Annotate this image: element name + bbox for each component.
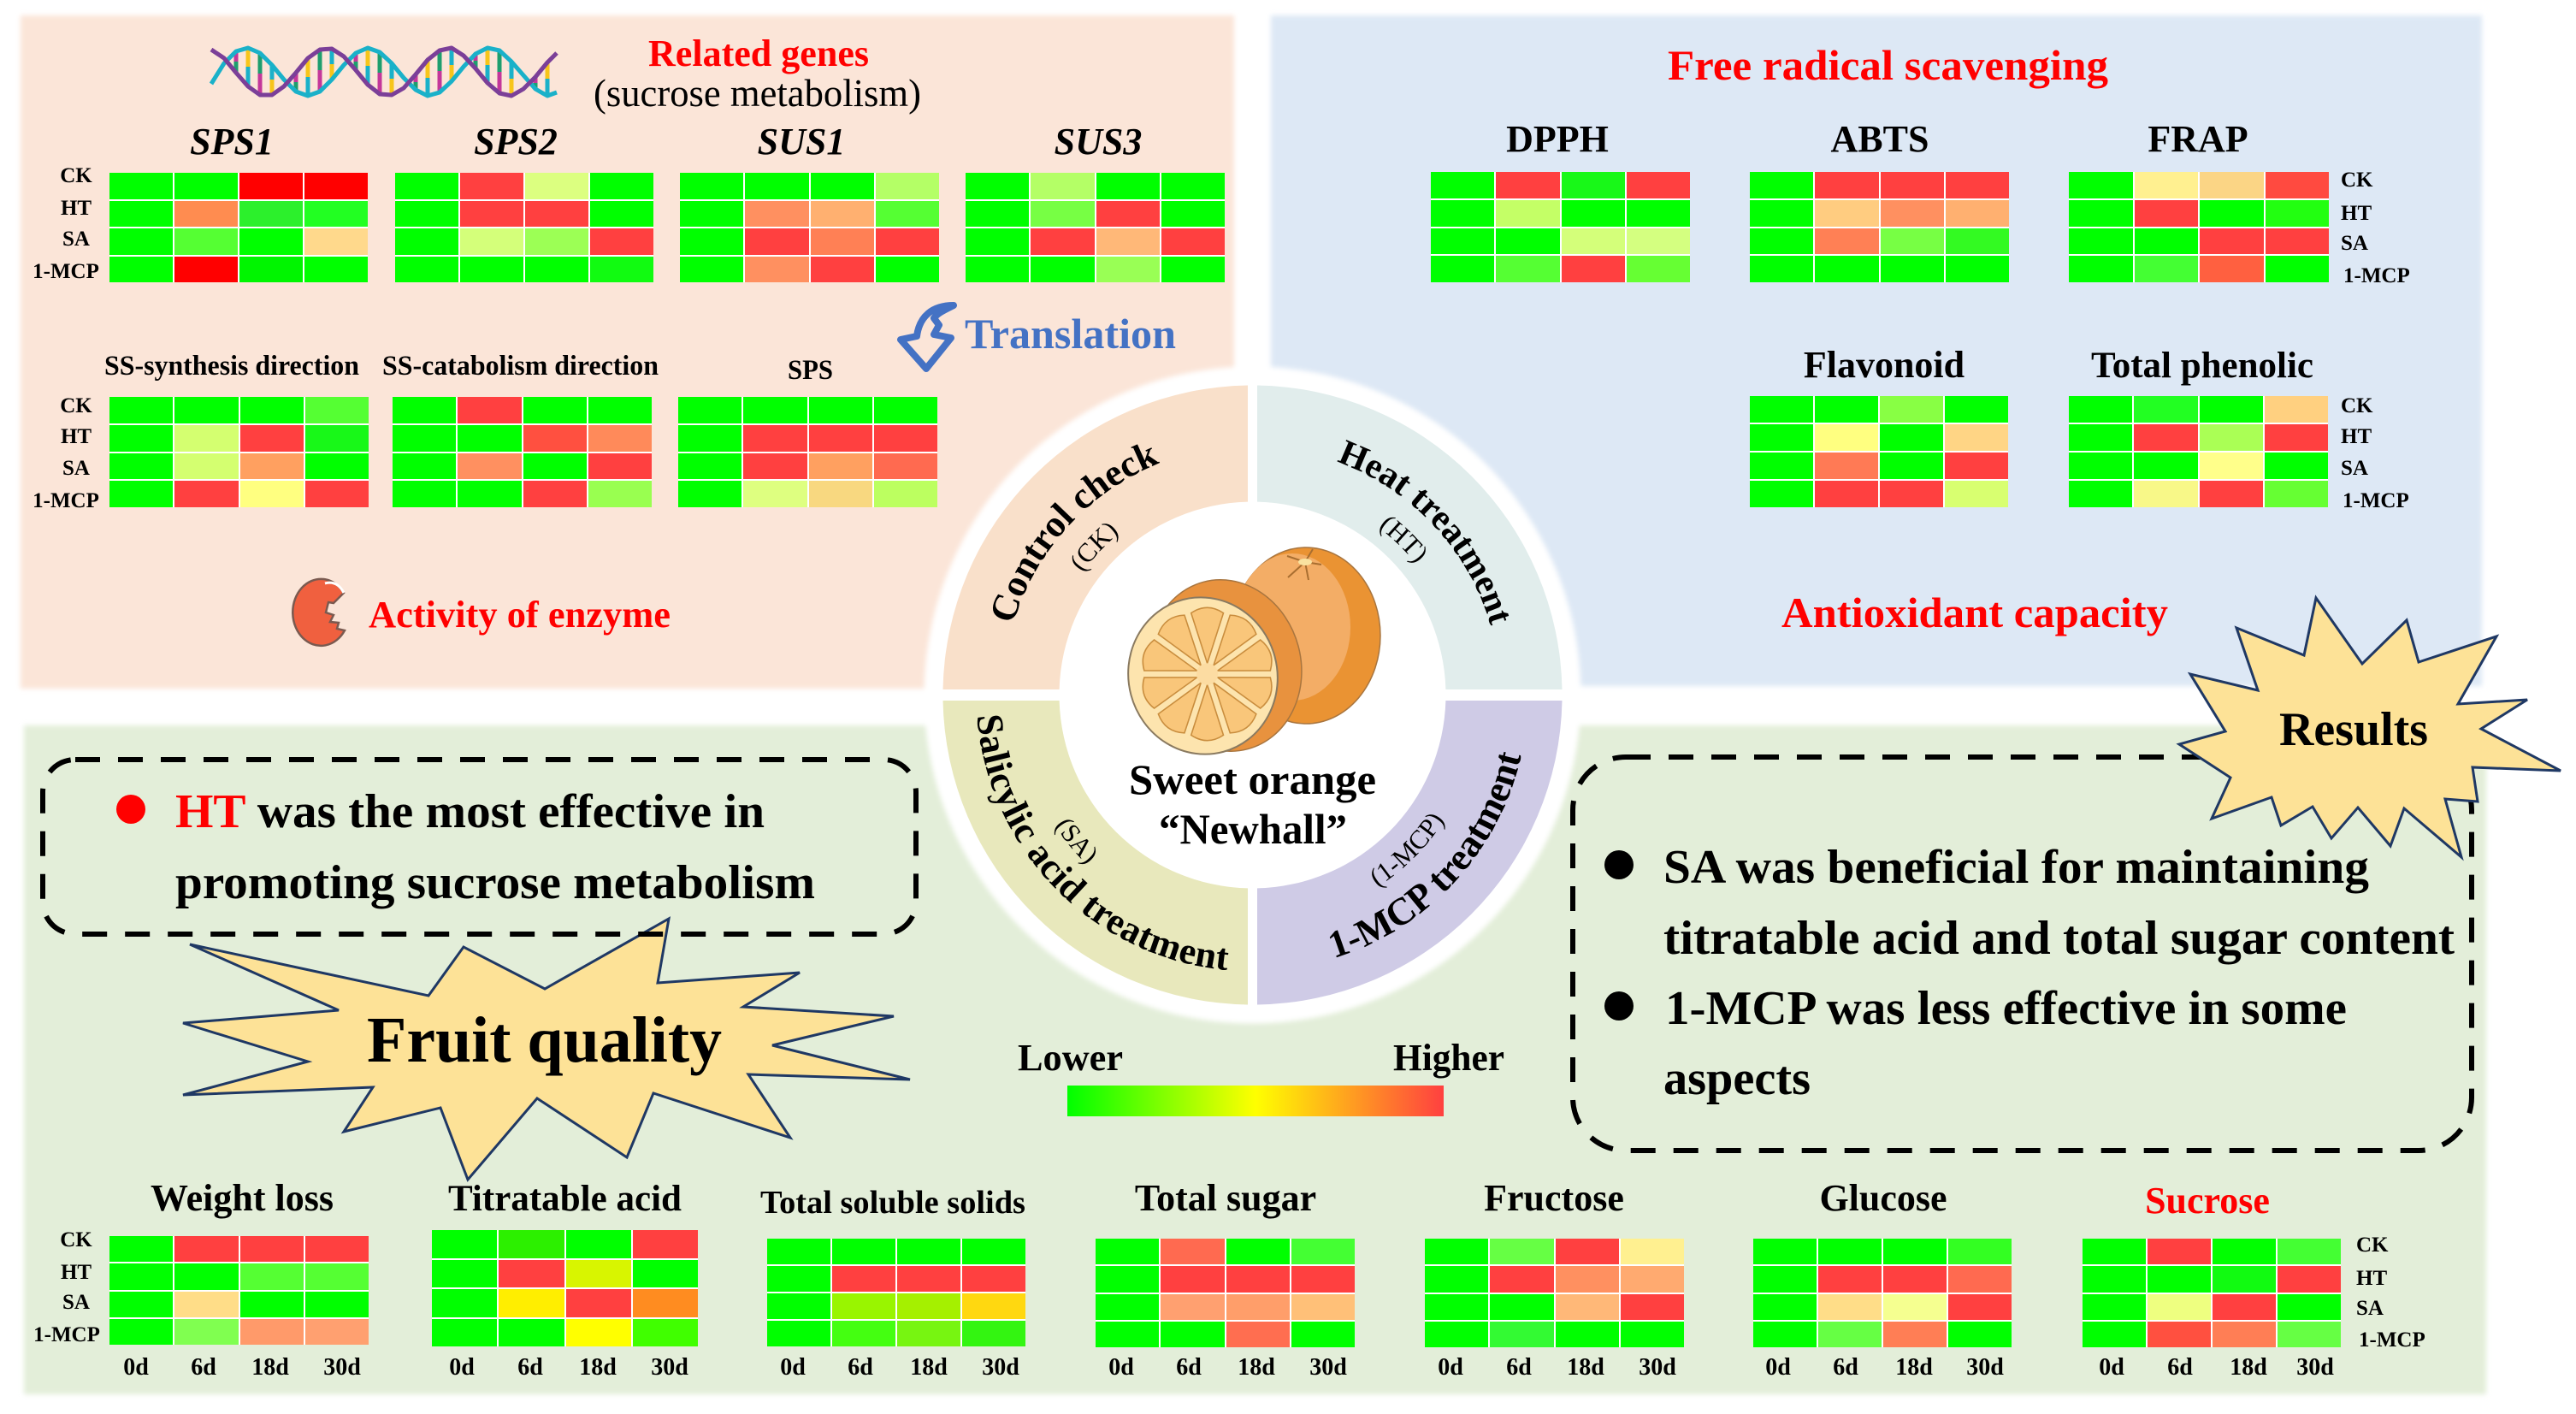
row labels: radical scavenging: 1-MCP: [2343, 264, 2410, 287]
axis labels: storage days: 0d: [1438, 1354, 1463, 1381]
title: Total sugar: Total sugar: [1135, 1177, 1316, 1219]
row labels: genes: HT: [61, 197, 92, 220]
title: SUS3: SUS3: [1055, 121, 1142, 163]
row labels: radical scavenging: CK: [2341, 169, 2373, 192]
segment: heat treatment: (HT): [1380, 517, 1426, 563]
callout: SA and 1-MCP findings: SA was beneficial for maintaining: [1663, 841, 2369, 894]
title: Flavonoid: Flavonoid: [1804, 344, 1964, 386]
title: Titratable acid: Titratable acid: [448, 1179, 682, 1219]
heatmap: SS-catabolism direction: [393, 397, 652, 507]
axis labels: storage days: 30d: [2296, 1354, 2334, 1381]
subheading: sucrose metabolism: (sucrose metabolism): [594, 71, 921, 115]
axis labels: storage days: 18d: [1567, 1354, 1604, 1381]
axis labels: storage days: 6d: [1506, 1354, 1532, 1381]
segment: control check: Control check: [992, 444, 1160, 620]
heatmap: ABTS: [1750, 172, 2009, 282]
row labels: antioxidants: HT: [2341, 425, 2372, 448]
callout: HT finding: [43, 760, 916, 934]
segment: 1-MCP treatment: (1-MCP): [1372, 814, 1445, 888]
title: Sucrose: Sucrose: [2145, 1180, 2270, 1222]
row labels: fruit quality: CK: [60, 1228, 92, 1251]
axis labels: storage days: 6d: [517, 1354, 543, 1381]
axis labels: storage days: 18d: [910, 1354, 948, 1381]
icon: translation arrow: [901, 305, 954, 369]
axis labels: storage days: 18d: [251, 1354, 289, 1381]
row labels: sucrose: [2356, 1234, 2425, 1352]
axis labels: storage days: 18d: [1238, 1354, 1275, 1381]
row labels: sucrose: SA: [2356, 1297, 2384, 1320]
icon: DNA helix: [211, 48, 557, 96]
legend: colour scale: [1018, 1037, 1504, 1116]
axis labels: storage days: 0d: [2099, 1354, 2124, 1381]
callout: HT finding: promoting sucrose metabolism: [175, 856, 815, 909]
callout: SA and 1-MCP findings: 1-MCP was less effective in some: [1665, 982, 2347, 1035]
row labels: genes: [32, 164, 99, 283]
heatmap: Total sugar: [1096, 1239, 1355, 1347]
heatmap: FRAP: [2069, 172, 2329, 282]
heatmap: DPPH: [1431, 172, 1690, 282]
axis labels: storage days: 6d: [1833, 1354, 1858, 1381]
axis labels: storage days: 30d: [1639, 1354, 1676, 1381]
heatmap: Fructose: [1425, 1239, 1684, 1347]
title: Weight loss: Weight loss: [151, 1177, 334, 1219]
heatmap: Sucrose: [2083, 1239, 2341, 1347]
heatmap: SUS3: [966, 173, 1225, 282]
row labels: antioxidants: [2341, 394, 2409, 512]
segment: salicylic acid treatment: Salicylic acid treatment: [977, 715, 1228, 970]
burst: fruit quality: [183, 919, 910, 1180]
title: SS-catabolism direction: SS-catabolism direction: [382, 351, 659, 382]
row labels: enzymes: [32, 394, 99, 512]
row labels: antioxidants: SA: [2341, 457, 2368, 480]
panel: fruit quality: [24, 725, 2486, 1394]
row labels: radical scavenging: SA: [2341, 232, 2368, 255]
axis labels: storage days: 30d: [982, 1354, 1019, 1381]
title: SPS1: SPS1: [190, 121, 274, 163]
row labels: radical scavenging: HT: [2341, 202, 2372, 225]
treatment wheel: [922, 365, 1582, 1025]
axis labels: storage days: 0d: [1108, 1354, 1134, 1381]
heading: free radical scavenging: Free radical scavenging: [1668, 41, 2108, 89]
title: Fructose: Fructose: [1484, 1177, 1624, 1219]
row labels: enzymes: 1-MCP: [32, 489, 99, 512]
callout: HT finding: HT was the most effective in: [175, 785, 765, 838]
row labels: sucrose: HT: [2356, 1267, 2387, 1290]
row labels: sucrose: 1-MCP: [2359, 1328, 2425, 1352]
segment: control check: (CK): [1072, 524, 1119, 571]
segment: control check: [942, 385, 1248, 689]
row labels: enzymes: CK: [60, 394, 92, 417]
axis labels: storage days: 30d: [651, 1354, 688, 1381]
segment: heat treatment: [1257, 385, 1562, 689]
heatmap: Glucose: [1753, 1239, 2012, 1347]
axis labels: storage days: 18d: [2230, 1354, 2267, 1381]
callout: SA and 1-MCP findings: aspects: [1663, 1052, 1811, 1105]
heatmap: SS-synthesis direction: [109, 397, 369, 507]
row labels: fruit quality: 1-MCP: [33, 1323, 100, 1346]
title: FRAP: FRAP: [2148, 118, 2248, 160]
heading: related genes: Related genes: [648, 33, 869, 74]
legend: colour scale: Higher: [1393, 1037, 1504, 1079]
icon: enzyme: [292, 579, 345, 646]
axis labels: storage days: 30d: [1309, 1354, 1347, 1381]
heatmap: Weight loss: [109, 1236, 369, 1345]
axis labels: storage days: 30d: [1966, 1354, 2004, 1381]
panel: sucrose metabolism: [21, 15, 1234, 689]
burst: results: [2179, 598, 2561, 857]
legend: colour scale: Lower: [1018, 1037, 1123, 1079]
label: sweet orange Newhall: “Newhall”: [1159, 805, 1347, 853]
row labels: genes: SA: [62, 228, 90, 251]
title: SUS1: SUS1: [758, 121, 845, 163]
row labels: fruit quality: SA: [62, 1291, 90, 1314]
axis labels: storage days: [123, 1354, 2334, 1381]
label: sweet orange Newhall: Sweet orange: [1129, 755, 1376, 803]
heatmap: SPS2: [395, 173, 653, 282]
callout: SA and 1-MCP findings: titratable acid and total sugar content: [1663, 912, 2455, 965]
axis labels: storage days: 18d: [1895, 1354, 1933, 1381]
segment: 1-MCP treatment: 1-MCP treatment: [1329, 751, 1521, 958]
label: translation: Translation: [965, 310, 1176, 358]
row labels: fruit quality: [33, 1228, 100, 1346]
heading: activity of enzyme: Activity of enzyme: [369, 594, 671, 636]
axis labels: storage days: 0d: [780, 1354, 806, 1381]
label: sweet orange Newhall: [1129, 755, 1376, 853]
axis labels: storage days: 6d: [191, 1354, 216, 1381]
row labels: genes: 1-MCP: [32, 260, 99, 283]
burst: results: Results: [2279, 703, 2428, 756]
axis labels: storage days: 30d: [323, 1354, 361, 1381]
row labels: fruit quality: HT: [61, 1261, 92, 1284]
heatmap: SPS enzyme: [678, 397, 937, 507]
burst: fruit quality: Fruit quality: [367, 1004, 722, 1076]
row labels: enzymes: HT: [61, 425, 92, 448]
segment: salicylic acid treatment: (SA): [1054, 819, 1096, 864]
axis labels: storage days: 0d: [123, 1354, 149, 1381]
title: ABTS: ABTS: [1831, 118, 1929, 160]
row labels: antioxidants: 1-MCP: [2343, 489, 2409, 512]
row labels: genes: CK: [60, 164, 92, 187]
segment: 1-MCP treatment: [1257, 701, 1562, 1004]
row labels: antioxidants: CK: [2341, 394, 2373, 417]
row labels: enzymes: SA: [62, 457, 90, 480]
title: SPS: SPS: [788, 355, 833, 386]
segment: heat treatment: Heat treatment: [1338, 440, 1509, 626]
panel: antioxidant capacity: [1271, 15, 2482, 686]
heatmap: SPS1: [109, 173, 368, 282]
title: Total soluble solids: Total soluble solids: [760, 1185, 1025, 1221]
icon: sweet orange: [1111, 547, 1380, 771]
callout: SA and 1-MCP findings: [1573, 757, 2472, 1151]
row labels: radical scavenging: [2341, 169, 2410, 287]
heading: antioxidant capacity: Antioxidant capacity: [1781, 589, 2168, 636]
heatmap: Total soluble solids: [767, 1239, 1025, 1346]
heatmap: Total phenolic: [2069, 396, 2328, 507]
axis labels: storage days: 0d: [449, 1354, 475, 1381]
axis labels: storage days: 6d: [2167, 1354, 2193, 1381]
heatmap: Titratable acid: [432, 1230, 698, 1346]
axis labels: storage days: 0d: [1765, 1354, 1791, 1381]
title: DPPH: DPPH: [1506, 118, 1609, 160]
axis labels: storage days: 6d: [1176, 1354, 1202, 1381]
title: Glucose: Glucose: [1819, 1177, 1947, 1219]
heatmap: SUS1: [680, 173, 939, 282]
title: SS-synthesis direction: SS-synthesis direction: [104, 351, 359, 382]
title: SPS2: SPS2: [474, 121, 558, 163]
axis labels: storage days: 6d: [848, 1354, 873, 1381]
row labels: sucrose: CK: [2356, 1234, 2389, 1257]
title: Total phenolic: Total phenolic: [2091, 346, 2313, 386]
heatmap: Flavonoid: [1750, 396, 2008, 507]
axis labels: storage days: 18d: [579, 1354, 617, 1381]
